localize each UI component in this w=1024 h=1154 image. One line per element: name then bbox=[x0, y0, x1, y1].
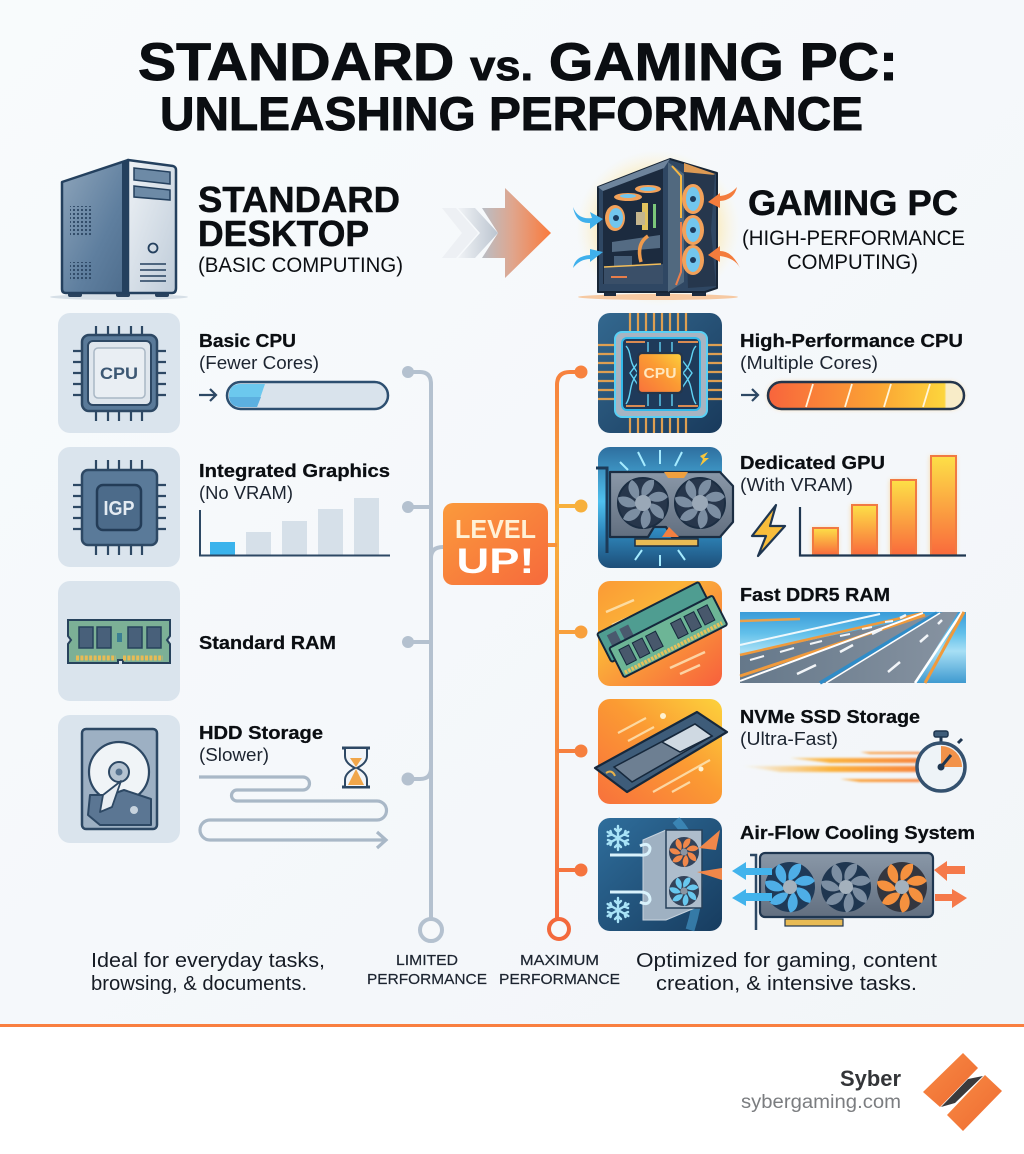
icon: ram sticks bbox=[597, 581, 727, 686]
text: hdd storage label bbox=[199, 723, 323, 765]
icon: igp chip bbox=[58, 447, 180, 567]
left connector: limited performance line bbox=[402, 366, 443, 941]
heading: gaming pc: (HIGH-PERFORMANCE bbox=[742, 227, 965, 250]
text: hdd storage label: HDD Storage bbox=[199, 723, 323, 743]
text: high-performance cpu label bbox=[740, 331, 963, 373]
heading: gaming pc bbox=[742, 184, 965, 274]
label: maximum performance: PERFORMANCE bbox=[499, 971, 620, 988]
icon: ram stick bbox=[58, 581, 180, 701]
caption: standard desktop use: Ideal for everyday tasks, bbox=[91, 950, 325, 972]
caption: gaming pc use bbox=[636, 950, 938, 995]
text: nvme ssd label bbox=[740, 707, 920, 749]
panel: fast ddr5 ram bbox=[597, 581, 966, 686]
text: fast ddr5 label: Fast DDR5 RAM bbox=[740, 585, 890, 605]
callout: level up: LEVEL bbox=[455, 514, 536, 544]
icon: gaming pc tower bbox=[573, 150, 740, 306]
callout: level up: UP! bbox=[456, 542, 534, 581]
icon: graphics card bbox=[596, 447, 733, 568]
panel: hdd storage bbox=[58, 715, 386, 848]
text: integrated graphics label bbox=[199, 461, 390, 503]
text: integrated graphics label: (No VRAM) bbox=[199, 483, 293, 503]
label: maximum performance: MAXIMUM bbox=[520, 952, 599, 969]
text: high-performance cpu label: (Multiple Cores) bbox=[740, 353, 878, 373]
illustration: speed highway bbox=[740, 612, 966, 683]
text: dedicated gpu label bbox=[740, 453, 885, 495]
heading: standard desktop bbox=[198, 179, 403, 277]
panel: dedicated gpu bbox=[596, 447, 966, 568]
brand text: Syber bbox=[840, 1066, 901, 1091]
panel: basic cpu bbox=[58, 313, 388, 433]
panel: integrated graphics bbox=[58, 447, 390, 567]
title: STANDARD vs. GAMING PC: bbox=[138, 33, 898, 92]
caption: standard desktop use: browsing, & documents. bbox=[91, 973, 307, 995]
text: hdd storage label: (Slower) bbox=[199, 745, 269, 765]
arrow: upgrade chevrons bbox=[442, 188, 551, 278]
icon: igp chip: IGP bbox=[104, 498, 134, 520]
text: basic cpu label bbox=[199, 331, 319, 373]
panel: standard ram bbox=[58, 581, 336, 701]
icon: syber logo bbox=[923, 1053, 1002, 1131]
panel: high-performance cpu bbox=[598, 313, 964, 433]
heading: gaming pc: COMPUTING) bbox=[787, 251, 918, 274]
label: maximum performance bbox=[499, 952, 620, 988]
icon: cpu chip: CPU bbox=[100, 364, 138, 383]
heading: gaming pc: GAMING PC bbox=[748, 184, 958, 223]
heading: standard desktop: DESKTOP bbox=[198, 213, 369, 254]
icon: cpu chip bbox=[58, 313, 180, 433]
arrow: slow winding path bbox=[199, 777, 386, 848]
bar chart: high gpu bbox=[800, 456, 966, 556]
icon: stopwatch with speed lines bbox=[742, 731, 965, 791]
callout: level up bbox=[443, 503, 548, 585]
heading: standard desktop: STANDARD bbox=[198, 179, 400, 220]
icon: m.2 ssd bbox=[595, 699, 727, 804]
caption: gaming pc use: creation, & intensive tasks. bbox=[656, 973, 917, 995]
text: dedicated gpu label: (With VRAM) bbox=[740, 475, 853, 495]
label: limited performance bbox=[367, 952, 487, 988]
title bbox=[138, 33, 898, 140]
icon: lightning bolt bbox=[752, 505, 785, 556]
icon: triple fan gpu with airflow bbox=[732, 853, 967, 930]
bar: low cpu performance bbox=[199, 382, 388, 409]
text: basic cpu label: (Fewer Cores) bbox=[199, 353, 319, 373]
icon: hourglass bbox=[342, 748, 370, 787]
text: integrated graphics label: Integrated Graphics bbox=[199, 461, 390, 481]
bar: high cpu performance bbox=[741, 382, 964, 409]
text: dedicated gpu label: Dedicated GPU bbox=[740, 453, 885, 473]
text: high-performance cpu label: High-Performance CPU bbox=[740, 331, 963, 351]
brand text: sybergaming.com bbox=[741, 1092, 901, 1113]
bar chart: low gpu bbox=[200, 498, 390, 556]
icon: hard drive bbox=[58, 715, 180, 843]
icon: glowing cpu bbox=[598, 313, 722, 433]
text: standard ram label: Standard RAM bbox=[199, 633, 336, 653]
text: nvme ssd label: NVMe SSD Storage bbox=[740, 707, 920, 727]
text: air-flow cooling label: Air-Flow Cooling System bbox=[740, 823, 975, 843]
heading: standard desktop: (BASIC COMPUTING) bbox=[198, 254, 403, 277]
caption: gaming pc use: Optimized for gaming, content bbox=[636, 950, 938, 972]
caption: standard desktop use bbox=[91, 950, 325, 995]
label: limited performance: LIMITED bbox=[396, 952, 458, 969]
footer band bbox=[0, 1027, 1024, 1154]
icon: glowing cpu: CPU bbox=[644, 365, 676, 382]
text: nvme ssd label: (Ultra-Fast) bbox=[740, 729, 838, 749]
orange footer rule bbox=[0, 1024, 1024, 1027]
icon: radiator with airflow bbox=[598, 818, 722, 931]
panel: air-flow cooling bbox=[598, 818, 975, 931]
icon: standard desktop tower bbox=[50, 160, 188, 300]
title: UNLEASHING PERFORMANCE bbox=[160, 87, 863, 140]
label: limited performance: PERFORMANCE bbox=[367, 971, 487, 988]
right connector: maximum performance line bbox=[548, 366, 588, 939]
text: basic cpu label: Basic CPU bbox=[199, 331, 296, 351]
panel: nvme ssd storage bbox=[595, 699, 965, 804]
brand text bbox=[741, 1066, 901, 1113]
